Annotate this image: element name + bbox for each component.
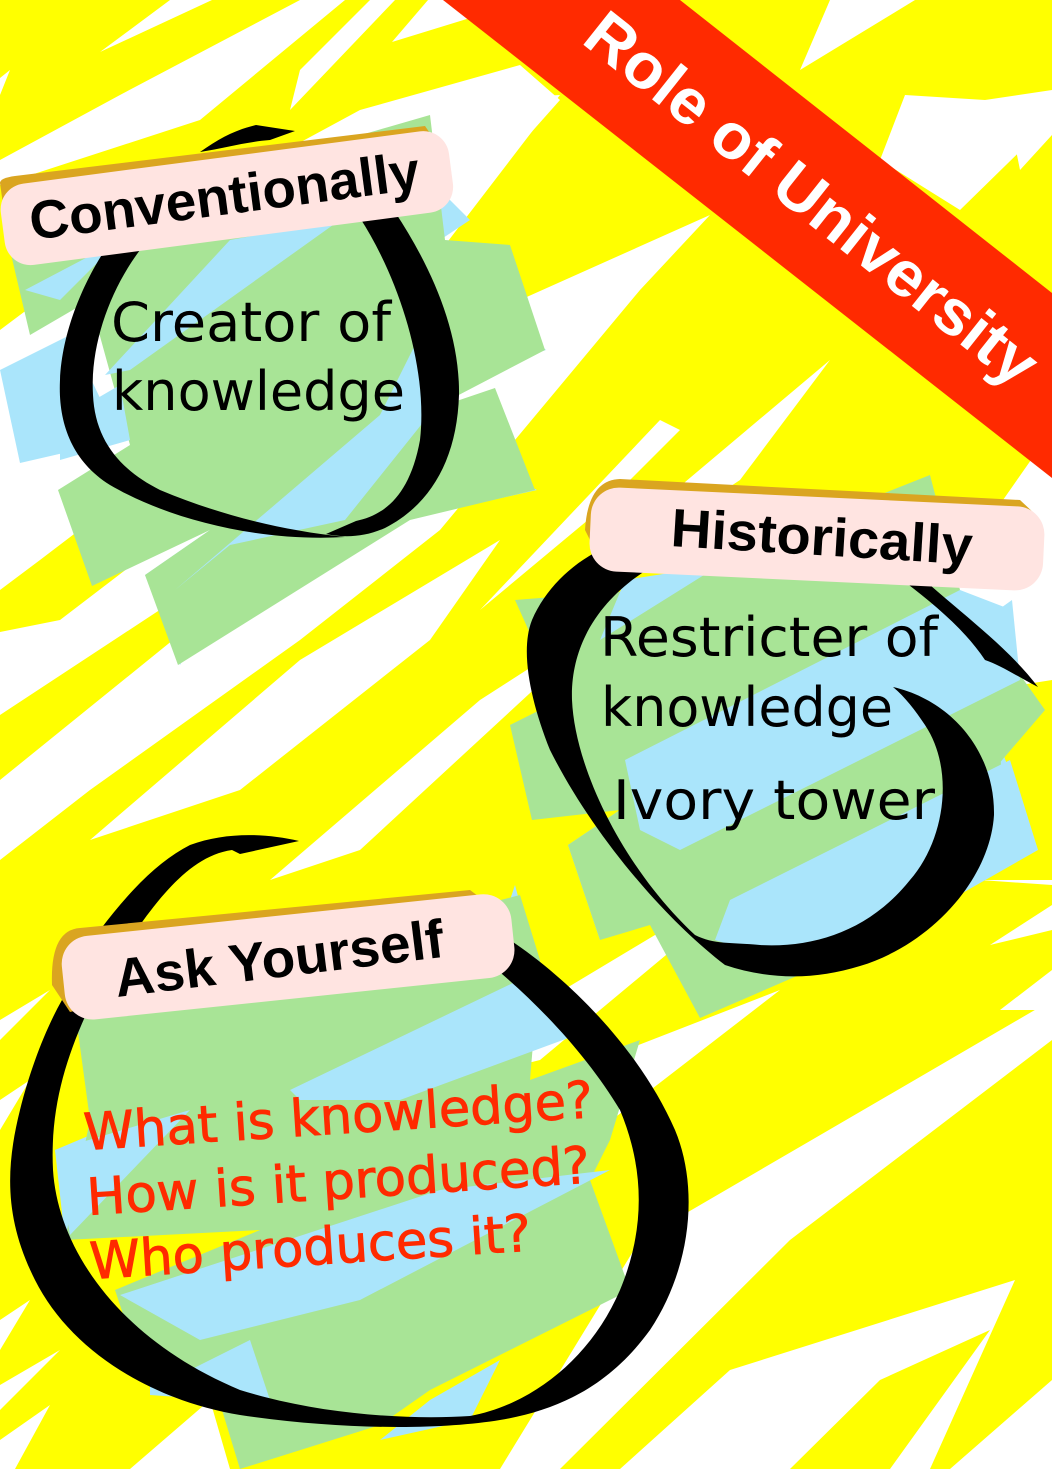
panel: conventionally highlight [0,115,546,665]
text: questions: What is knowledge? [82,1071,595,1163]
label: conventionally [0,126,456,268]
heading: ask yourself: Ask Yourself [111,909,448,1009]
text: questions: How is it produced? [85,1137,592,1228]
text: creator of knowledge [111,291,405,423]
banner title: Role of University [571,0,1052,401]
text: questions [82,1071,595,1292]
label: ask yourself [52,890,517,1022]
heading: historically: Historically [669,498,974,576]
label: historically [585,479,1046,592]
panel: ask yourself highlight [55,885,640,1469]
text: restricter of knowledge, ivory tower: knowledge [601,676,893,739]
loop: ask yourself [10,835,689,1427]
text: restricter of knowledge, ivory tower: Restricter of [600,606,940,669]
loop: conventionally [60,125,459,538]
banner [443,0,1052,478]
panel: historically highlight [510,475,1045,1018]
text: questions: Who produces it? [88,1205,533,1292]
text: creator of knowledge: knowledge [112,360,405,423]
text: restricter of knowledge, ivory tower: Ivory tower [613,769,936,832]
loop: historically [527,550,1038,976]
text: restricter of knowledge, ivory tower [600,606,940,832]
text: creator of knowledge: Creator of [111,291,393,354]
heading: conventionally: Conventionally [26,141,423,252]
